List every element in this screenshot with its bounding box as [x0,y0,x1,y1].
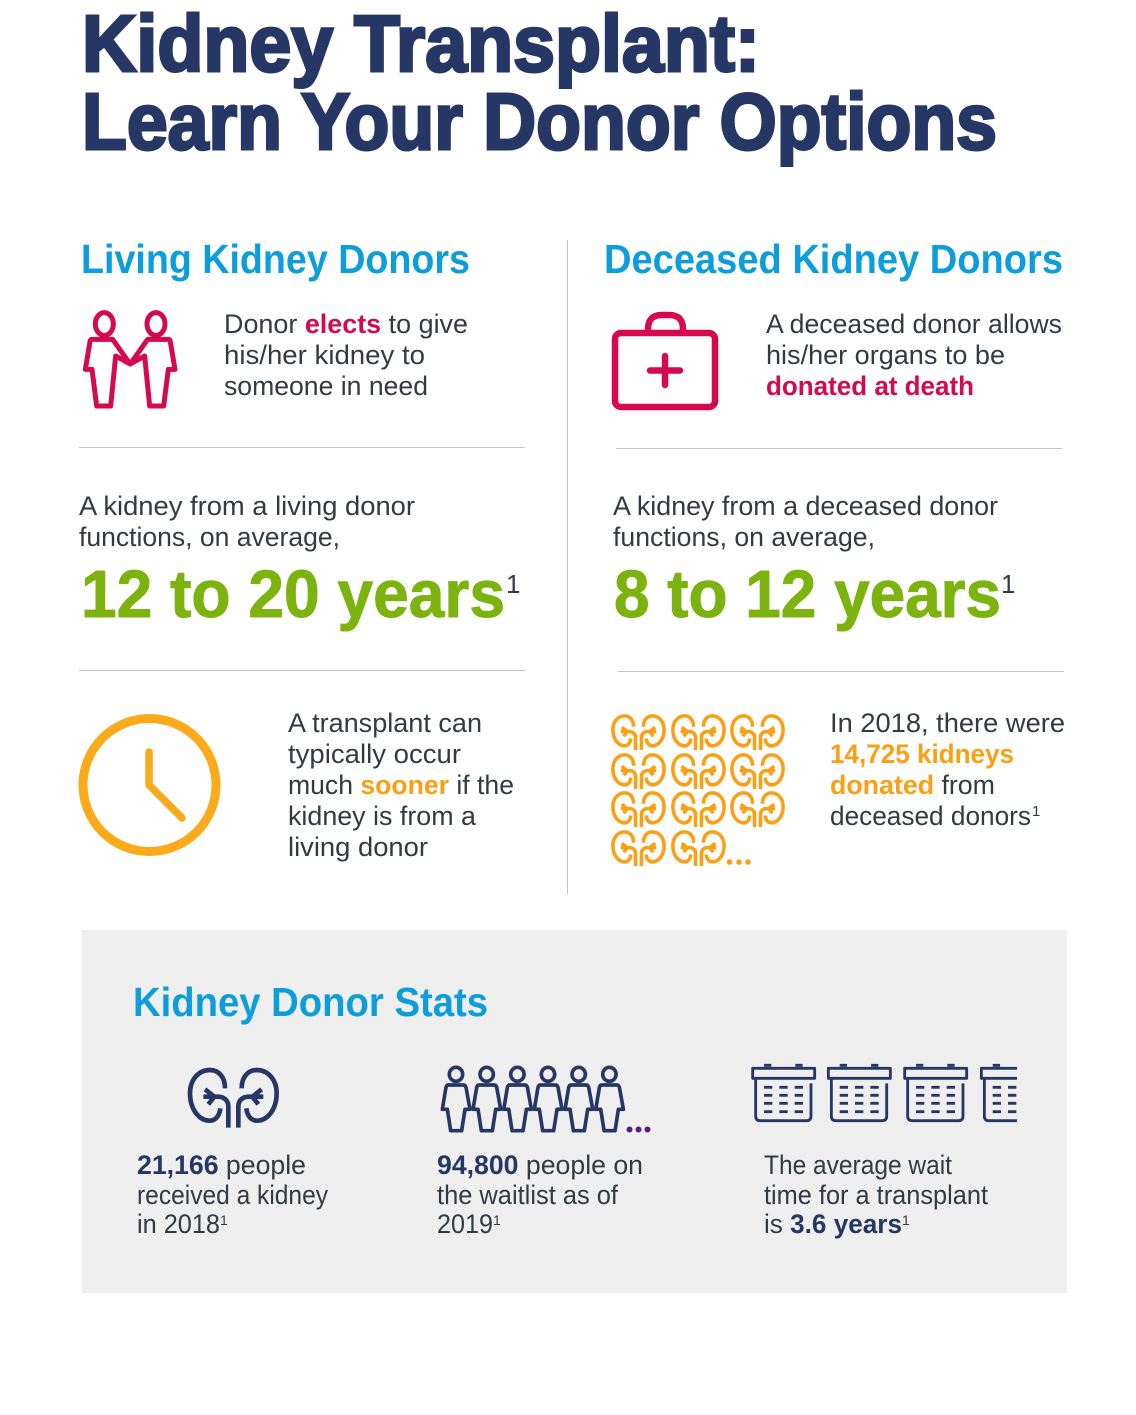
text: 14,725 kidneys donated: 1 [1032,803,1040,820]
stat: 12 to 20 years: 12 to 20 years [81,557,505,632]
text: 14,725 kidneys donated: In 2018, there were [830,708,1065,738]
text: deceased donor allows [766,309,1062,401]
text: transplant sooner: A transplant can [288,708,482,738]
text: living donor function: A kidney from a living donor [79,491,415,521]
text: deceased donor function: functions, on average, [613,522,875,552]
text: donor elects [224,309,468,401]
title [82,0,997,166]
text: transplant sooner [288,708,514,862]
text: donor elects: someone in need [224,371,428,401]
panel: living kidney donors [79,236,525,862]
text: deceased donor allows: donated at death [766,371,974,401]
stat: 12 to 20 years: 1 [506,569,520,599]
text: donor elects: Donor elects to give [224,309,468,339]
text: deceased donor function [613,491,998,552]
column divider [567,240,568,894]
icon: navy kidneys [190,1070,277,1128]
panel: deceased kidney donors [604,236,1065,866]
text: 94,800 people: the waitlist as of [437,1180,618,1210]
text: deceased donor function: A kidney from a deceased donor [613,491,998,521]
icon: clock [83,718,216,852]
text: 14,725 kidneys donated: deceased donors [830,801,1031,831]
text: average wait: time for a transplant [764,1180,988,1210]
text: 14,725 kidneys donated [830,708,1065,831]
text: 94,800 people [437,1150,643,1239]
title: Learn Your Donor Options [82,77,997,166]
icon: medical kit [615,315,715,407]
text: transplant sooner: much sooner if the [288,770,514,800]
text: transplant sooner: typically occur [288,739,461,769]
text: living donor function: functions, on average, [79,522,340,552]
title: Kidney Transplant: [82,0,760,88]
text: deceased donor allows: A deceased donor allows [766,309,1062,339]
heading: living donors: Living Kidney Donors [81,236,470,282]
text: average wait: 1 [902,1212,910,1228]
text: 21,166 people: in 2018 [137,1209,220,1239]
icon: row of calendars [753,1065,1043,1121]
text: 14,725 kidneys donated: donated from [830,770,995,800]
text: 21,166 people [137,1150,328,1239]
text: transplant sooner: kidney is from a [288,801,477,831]
text: average wait: The average wait [764,1150,952,1180]
icon: row of people on waitlist [442,1067,650,1132]
text: 94,800 people: 2019 [437,1209,493,1239]
text: 94,800 people: 94,800 people on [437,1150,643,1180]
stat: 8 to 12 years: 8 to 12 years [614,557,1001,632]
text: 21,166 people: received a kidney [137,1180,328,1210]
heading: deceased donors: Deceased Kidney Donors [604,236,1063,282]
text: 94,800 people: 1 [493,1212,501,1228]
text: living donor function [79,491,415,552]
panel: kidney donor stats [82,930,1067,1293]
text: average wait [764,1150,988,1239]
text: 14,725 kidneys donated: 14,725 kidneys [830,739,1014,769]
text: donor elects: his/her kidney to [224,340,425,370]
heading: kidney donor stats: Kidney Donor Stats [133,979,488,1025]
icon: two people holding hands [85,313,175,406]
text: average wait: is 3.6 years [764,1209,902,1239]
text: 21,166 people: 1 [220,1212,228,1228]
text: deceased donor allows: his/her organs to be [766,340,1005,370]
stat: 8 to 12 years: 1 [1001,569,1015,599]
text: 21,166 people: 21,166 people [137,1150,306,1180]
icon: grid of orange kidneys [613,716,783,866]
text: transplant sooner: living donor [288,832,428,862]
